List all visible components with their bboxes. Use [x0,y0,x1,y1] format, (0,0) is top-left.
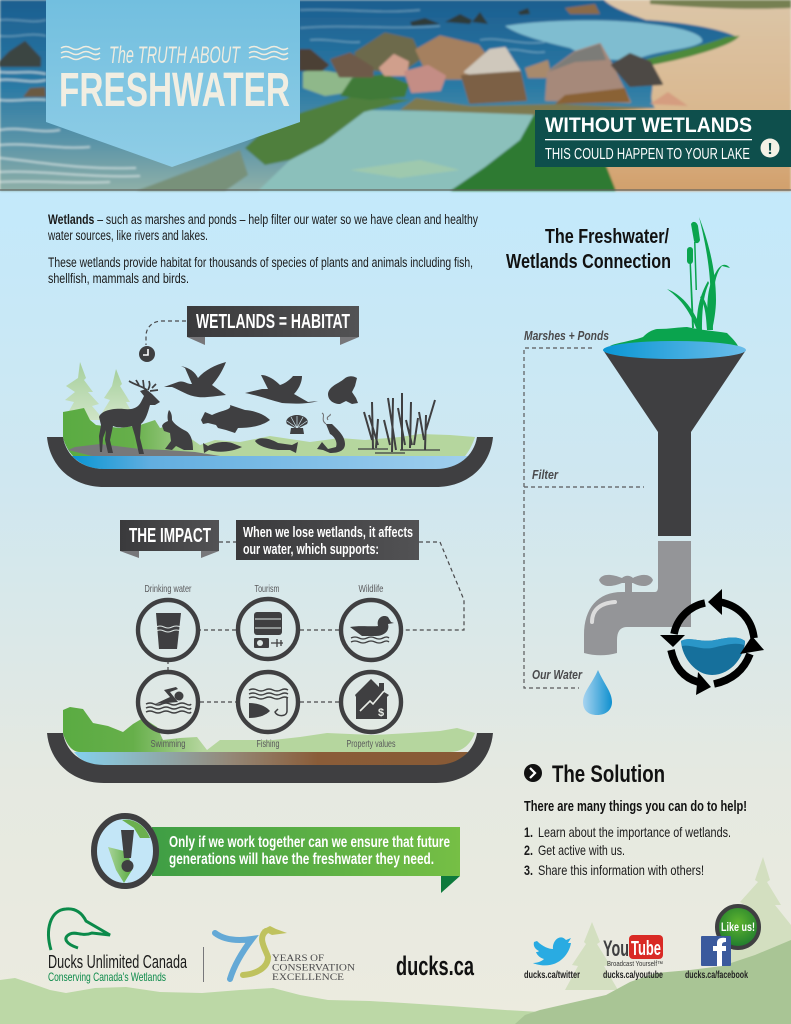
heading [506,226,671,273]
item: wildlife: Wildlife [358,583,384,595]
social: youtube: Tube [631,938,661,960]
fish [201,405,270,433]
item: fishing: Fishing [256,738,280,750]
logo: ducks unlimited canada [48,909,188,984]
social: youtube: You [603,936,629,961]
solution list: 3. [524,862,533,878]
intro box: our water, which supports: [243,541,379,558]
intro text: Wetlands – such as marshes and ponds – help filter our water so we have clean and healthy [48,212,478,227]
callout: without wetlands: WITHOUT WETLANDS [545,114,752,137]
bird [245,375,318,404]
water [72,456,468,469]
clock connector [139,321,186,362]
connectors [168,542,464,702]
lagoon [505,20,702,60]
item: swimming [138,672,198,750]
item: wildlife [341,583,401,660]
heading: Wetlands Connection [506,251,671,273]
panel: the impact [47,520,493,783]
panel: wetlands habitat [47,306,493,487]
callout: without wetlands: ! [767,141,773,158]
heading: wetlands = habitat: WETLANDS = HABITAT [196,311,350,333]
wave icon left [61,46,100,60]
pale algae water [258,110,535,191]
social: twitter: ducks.ca/twitter [524,970,580,981]
tray [47,437,493,487]
plant [610,217,738,346]
heading: The Freshwater/ [545,226,669,248]
callout: work together: generations will have the freshwater they need. [169,851,434,868]
item: property values: $ [378,707,384,719]
panel: freshwater wetlands connection [506,217,764,715]
title ribbon [46,0,300,167]
website: ducks.ca [396,951,475,981]
solution list: Get active with us. [538,842,625,858]
heading: the impact [120,520,219,558]
solution list: Share this information with others! [538,862,704,878]
marsh ground [63,408,475,468]
logo: 75 years: YEARS OF [272,954,324,964]
solution list: 2. [524,842,533,858]
intro text: These wetlands provide habitat for thousands of species of plants and animals including fish, [48,255,473,270]
item: property values [341,672,401,750]
footer landscape [0,857,791,1024]
item: drinking water: Drinking water [144,583,192,595]
logo: 75 years: EXCELLENCE [272,973,344,983]
item: property values: Property values [346,738,396,750]
connector labels: Our Water [532,667,583,682]
title line two: FRESHWATER [59,64,290,117]
logo: 75 years: CONSERVATION [272,964,355,974]
social: facebook: Like us! [721,920,755,934]
fish [203,442,242,453]
intro box [236,520,419,560]
solution list [524,824,731,878]
connector labels [524,328,609,682]
item: tourism [238,583,298,659]
logo: ducks unlimited canada: Ducks Unlimited Canada [48,952,188,972]
social: facebook [685,906,759,981]
social: youtube [603,935,663,981]
recycle water icon [660,589,764,695]
callout: work together: Only if we work together can we ensure that future [169,834,450,851]
water drop [583,670,612,715]
item: drinking water [138,583,198,660]
rocks [300,50,328,70]
scallop [286,415,308,434]
logo: ducks unlimited canada: Conserving Canada's Wetlands [48,970,166,984]
solution list: Learn about the importance of wetlands. [538,824,731,840]
funnel [603,341,746,536]
frog [328,376,358,404]
algae [245,96,410,165]
deer [99,380,160,454]
faucet [584,541,691,655]
wave icon right [249,46,288,60]
heading: wetlands = habitat [187,306,359,345]
trees [64,362,134,420]
title line one: The TRUTH ABOUT [109,42,241,69]
heading with arrow icon: The Solution [552,761,665,788]
intro text [47,212,478,286]
logo: 75 years [215,926,355,983]
shrimp [317,413,345,453]
item: tourism: Tourism [254,583,280,595]
social: facebook: ducks.ca/facebook [685,970,748,981]
social: twitter [524,937,580,981]
connector labels: Filter [532,467,559,482]
intro text: water sources, like rivers and lakes. [47,228,208,243]
fish [255,438,298,453]
intro text: shellfish, mammals and birds. [48,271,189,286]
mud bank [68,444,260,458]
impact tray [47,707,493,783]
callout: without wetlands [535,110,791,167]
intro box: When we lose wetlands, it affects [243,524,413,541]
social: youtube: ducks.ca/youtube [603,970,663,981]
sand [600,0,791,191]
panel: the solution [524,761,747,878]
bird [164,362,226,397]
item: fishing [238,672,298,750]
item: swimming: Swimming [150,738,186,750]
connector labels: Marshes + Ponds [524,328,609,343]
callout: work together [94,816,460,893]
reeds [358,393,440,453]
social: youtube: Broadcast Yourself™ [607,961,663,968]
rabbit [162,410,193,450]
solution list: 1. [524,824,533,840]
heading with arrow icon [524,761,665,788]
heading: the impact: THE IMPACT [129,525,211,547]
photo: lake shoreline with algae [0,0,791,191]
